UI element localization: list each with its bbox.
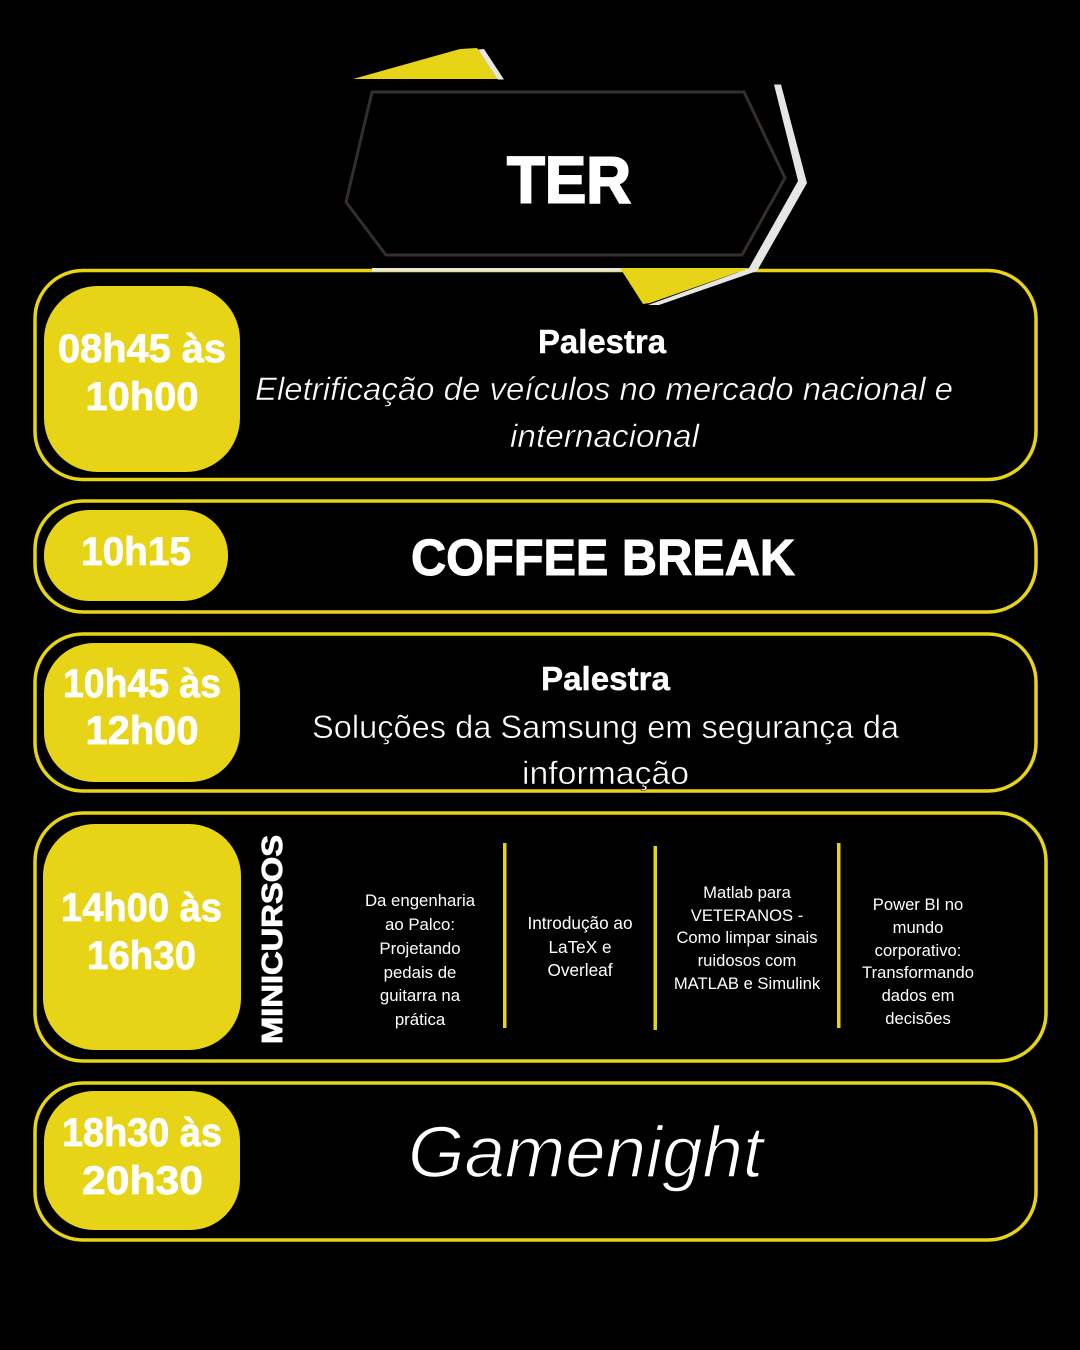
course 1: guitarra na (380, 986, 461, 1005)
talk heading: Palestra (538, 323, 667, 360)
talk heading: Palestra (541, 660, 671, 697)
panel outline (35, 634, 1036, 791)
day badge (346, 48, 807, 305)
course 3 (674, 883, 821, 993)
course 1 (365, 891, 476, 1029)
right white chevron (749, 84, 807, 271)
panel outline (35, 813, 1046, 1061)
course 3: ruidosos com (698, 951, 796, 970)
course 2 (527, 913, 633, 980)
bottom white line (372, 268, 622, 272)
course 4: dados em (882, 986, 954, 1005)
course 2: LaTeX e (548, 937, 612, 957)
time pill (44, 286, 240, 472)
panel: coffee break (35, 501, 1036, 612)
time text (62, 1111, 222, 1203)
panel: gamenight (35, 1083, 1036, 1240)
time text: 18h30 às (62, 1111, 222, 1155)
course 1: ao Palco: (385, 915, 455, 934)
time text (61, 886, 222, 978)
top yellow accent (353, 48, 498, 79)
course 3: VETERANOS - (691, 906, 803, 925)
talk title: Eletrificação de veículos no mercado nacional e (255, 371, 953, 407)
day title: TER (507, 142, 631, 216)
talk title (255, 371, 953, 454)
course 3: Como limpar sinais (676, 928, 818, 947)
time text (58, 327, 226, 419)
time pill (44, 1091, 240, 1230)
course 1: prática (395, 1010, 446, 1029)
time text: 16h30 (87, 934, 196, 978)
time pill (44, 510, 228, 601)
hexagon outline (346, 92, 785, 255)
course 1: pedais de (384, 963, 456, 982)
bottom yellow accent (620, 268, 750, 304)
panel: talk 1 (35, 270, 1036, 480)
coffee break heading: COFFEE BREAK (411, 529, 795, 586)
talk title: informação (522, 755, 689, 791)
time text: 14h00 às (61, 886, 222, 930)
course 1: Da engenharia (365, 891, 476, 910)
time text: 12h00 (86, 709, 198, 753)
vertical label: MINICURSOS (257, 835, 289, 1044)
panel: minicursos (35, 813, 1046, 1061)
talk title: Soluções da Samsung em segurança da (312, 709, 899, 745)
time pill (43, 824, 241, 1050)
panel: talk 2 (35, 634, 1036, 791)
course 4: Power BI no (873, 895, 963, 914)
time text: 10h00 (86, 375, 198, 419)
course 4: corporativo: (875, 941, 961, 960)
time text (63, 662, 221, 753)
panel outline (35, 501, 1036, 612)
course 4 (862, 895, 974, 1028)
course 2: Overleaf (548, 960, 613, 980)
course 3: MATLAB e Simulink (674, 974, 821, 993)
time pill (44, 643, 240, 782)
top white accent (478, 49, 504, 80)
course 4: Transformando (862, 963, 974, 982)
course 2: Introdução ao (527, 913, 633, 933)
time text: 10h45 às (63, 662, 221, 706)
course 4: mundo (893, 918, 943, 937)
gamenight heading: Gamenight (408, 1113, 766, 1193)
panel outline (35, 1083, 1036, 1240)
time text: 10h15 (81, 530, 191, 574)
course 1: Projetando (379, 939, 461, 958)
course 4: decisões (885, 1009, 951, 1028)
talk title (312, 709, 899, 791)
bottom white accent (648, 268, 757, 305)
time text: 08h45 às (58, 327, 226, 371)
course 3: Matlab para (703, 883, 792, 902)
time text: 20h30 (82, 1159, 203, 1203)
talk title: internacional (510, 418, 700, 454)
panel outline (35, 270, 1036, 480)
